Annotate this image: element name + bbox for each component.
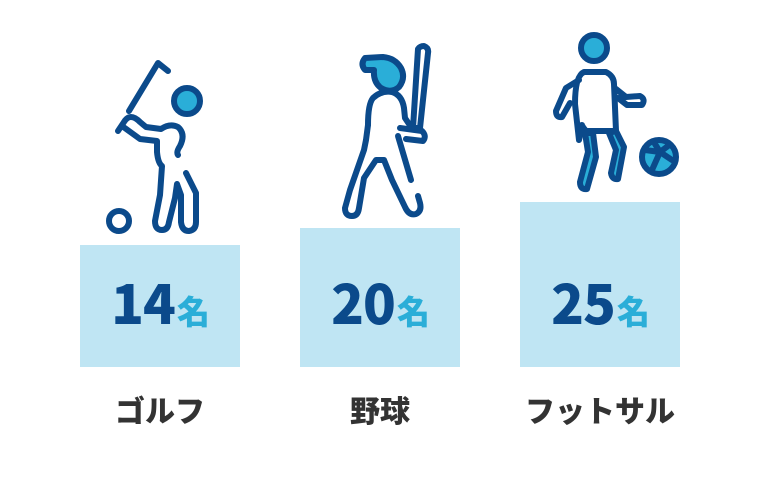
- box: golf: [80, 245, 240, 367]
- icon: golfer: [109, 63, 200, 231]
- icon: baseball batter: [345, 46, 428, 216]
- label: futsal: フットサル: [525, 387, 675, 431]
- label: baseball: 野球: [350, 387, 410, 431]
- label: golf: ゴルフ: [115, 387, 205, 431]
- box: baseball: [300, 228, 460, 367]
- box: futsal: [520, 202, 680, 367]
- icon: futsal player: [556, 35, 676, 189]
- number: golf: 14名: [111, 261, 209, 340]
- number: futsal: 25名: [551, 261, 649, 340]
- number: baseball: 20名: [331, 261, 429, 340]
